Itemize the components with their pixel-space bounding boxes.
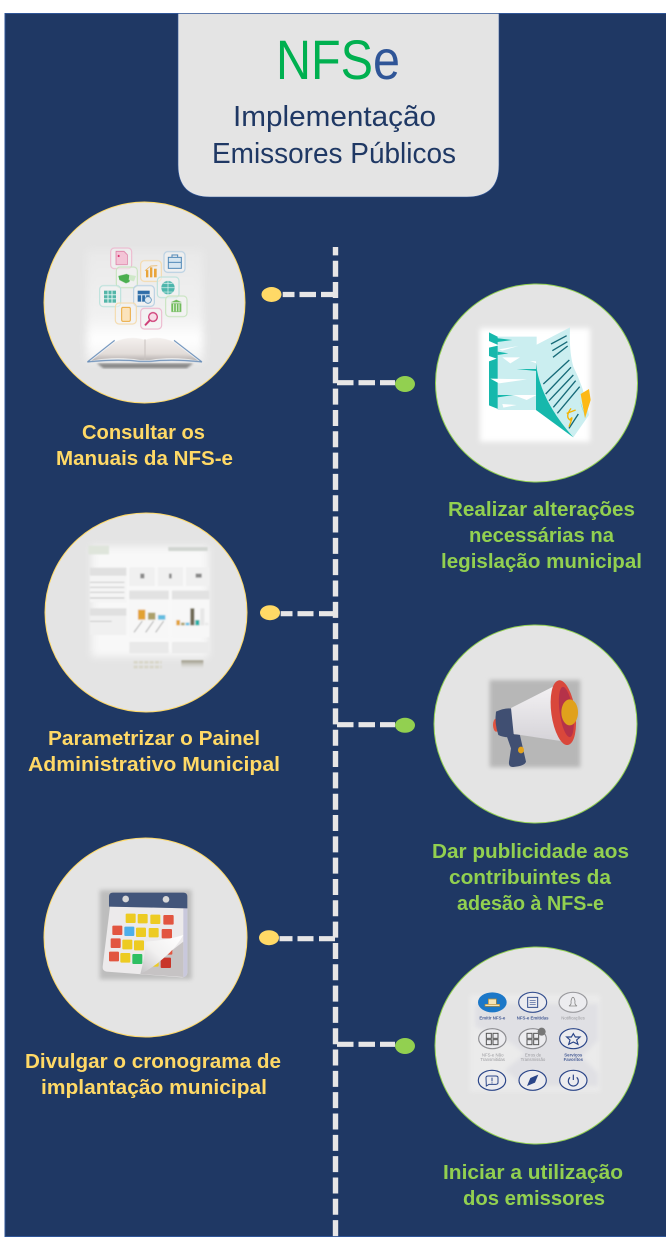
- label: step 3: Administrativo Municipal: [28, 754, 280, 776]
- circle: app screen icons: Serviços: [564, 1052, 583, 1057]
- label: step 5: Divulgar o cronograma de: [25, 1051, 281, 1073]
- label: step 4: [432, 841, 629, 915]
- circle: app screen icons: Transmissão: [521, 1057, 546, 1062]
- label: step 1: Consultar os: [82, 422, 205, 444]
- circle: app screen icons: [435, 947, 638, 1144]
- connector: step 6: [337, 1038, 415, 1054]
- label: step 3: [28, 728, 280, 776]
- connector: step 5: [259, 930, 335, 945]
- circle: app screen icons: Notificações: [561, 1015, 585, 1020]
- circle: dashboard screenshot: [45, 513, 247, 712]
- connector: step 3: [260, 605, 334, 620]
- circle: legislation document icon: [436, 284, 638, 482]
- label: step 4: adesão à NFS-e: [457, 893, 604, 915]
- circle: app screen icons: Favoritos: [564, 1057, 584, 1062]
- label: step 2: legislação municipal: [441, 551, 642, 573]
- title: NFSe: NFSe: [276, 28, 400, 91]
- label: step 2: Realizar alterações: [448, 499, 635, 521]
- connector: step 1: [262, 287, 334, 302]
- label: step 4: contribuintes da: [449, 867, 612, 889]
- label: step 6: Iniciar a utilização: [443, 1162, 623, 1184]
- label: step 1: [56, 422, 233, 470]
- label: step 5: [25, 1051, 281, 1099]
- label: step 2: necessárias na: [469, 525, 615, 547]
- label: step 5: implantação municipal: [41, 1077, 267, 1099]
- label: step 6: [443, 1162, 623, 1210]
- header card: [178, 14, 499, 197]
- connector: step 2: [337, 376, 415, 392]
- label: step 2: [441, 499, 642, 573]
- label: step 3: Parametrizar o Painel: [48, 728, 260, 750]
- vertical dashed timeline: [333, 247, 338, 1237]
- circle: app screen icons: NFS-e Emitidas: [517, 1015, 549, 1020]
- circle: app screen icons: NFS-e Não: [482, 1052, 504, 1057]
- circle: manuals with book icon: [44, 202, 245, 403]
- circle: megaphone icon: [434, 625, 637, 823]
- circle: app screen icons: Emitir NFS-e: [479, 1015, 506, 1020]
- label: step 4: Dar publicidade aos: [432, 841, 629, 863]
- subtitle line 2: Emissores Públicos: [212, 138, 456, 170]
- circle: app screen icons: Erros de: [525, 1052, 542, 1057]
- label: step 1: Manuais da NFS-e: [56, 448, 233, 470]
- circle: app screen icons: Transmitidas: [480, 1057, 505, 1062]
- subtitle line 1: Implementação: [233, 101, 436, 133]
- label: step 6: dos emissores: [463, 1188, 605, 1210]
- circle: calendar icon: [44, 838, 247, 1037]
- connector: step 4: [337, 718, 415, 733]
